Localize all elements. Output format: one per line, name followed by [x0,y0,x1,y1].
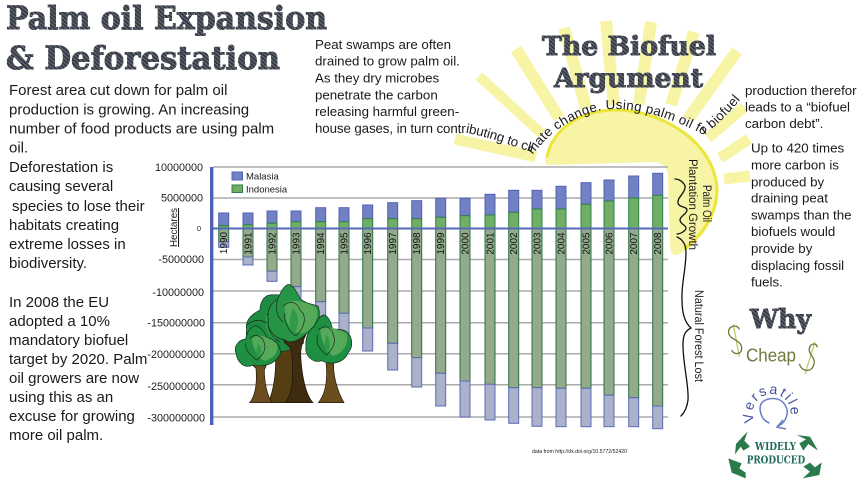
icon: dollar sign left [729,324,742,357]
icon: dollar sign right [799,342,817,374]
y-axis labels: 0 [197,224,201,233]
label: Widely Produced: WIDELY [754,439,797,453]
text block: 420 times more carbon: swamps than the [751,207,852,222]
heading: The Biofuel Argument [542,32,716,94]
year labels: 2002 [509,232,520,255]
brace: natural forest lost [677,237,691,416]
text block: biofuel carbon debt [745,83,857,131]
year labels: 2006 [604,232,616,255]
sun outline [547,110,717,249]
label: Cheap: Cheap [746,346,796,366]
bar 1993 [291,211,301,310]
heading: The Biofuel Argument: The Biofuel [542,32,716,62]
text block: EU biofuel target: adopted a 10% [9,313,110,330]
text block: 420 times more carbon: more carbon is [751,157,839,172]
legend [232,172,288,196]
y-axis labels [147,162,205,425]
text block: 420 times more carbon: biofuels would [751,224,835,239]
year labels: 1999 [436,232,447,255]
heading: Why: Why [749,305,812,335]
text block: forest area: oil. [9,140,28,156]
text block: EU biofuel target [9,294,147,444]
year labels [219,231,664,255]
bar 2000 [460,198,470,417]
tree: left [235,326,281,403]
text block: peat swamps: drained to grow palm oil. [315,54,460,69]
bar 1992 [267,211,277,281]
text block: peat swamps: penetrate the carbon [315,87,438,102]
legend: Malasia [246,172,279,182]
text block: 420 times more carbon: displacing fossil [751,258,844,273]
zero line [213,228,668,230]
bar 2004 [556,186,566,427]
y-axis labels: -200000000 [147,349,205,361]
year labels: 1990 [219,231,230,254]
text block: biofuel carbon debt: carbon debt”. [745,116,823,131]
text block: EU biofuel target: target by 2020. Palm [9,351,147,368]
y-axis labels: 10000000 [155,162,203,174]
text block: EU biofuel target: mandatory biofuel [9,332,128,349]
text block: EU biofuel target: oil growers are now [9,370,139,387]
text block: biofuel carbon debt: leads to a “biofuel [745,100,850,115]
y-axis labels: -5000000 [158,254,204,266]
text block: deforestation: causing several [9,178,113,195]
tree: center [268,284,319,403]
bar 2006 [604,180,614,427]
y-axis labels: -250000000 [147,381,205,393]
bar 1991 [243,213,253,265]
bar 1998 [412,201,422,387]
bar 2001 [485,194,495,420]
text block: 420 times more carbon: Up to 420 times [751,141,844,156]
y-axis labels: 5000000 [161,193,203,205]
bar 1997 [388,203,398,370]
y-axis labels: -10000000 [152,287,204,299]
y-axis labels: -300000000 [147,413,205,425]
bar 2007 [629,176,639,427]
label: Plantation Growth: Plantation Growth [686,159,698,250]
text block: 420 times more carbon: draining peat [751,191,828,206]
text block: deforestation: extreme losses in [9,236,126,253]
year labels: 1991 [244,232,254,255]
text block: forest area [9,82,274,156]
year labels: 1993 [292,232,302,255]
year labels: 2008 [653,232,664,255]
bars [219,173,663,429]
text block: EU biofuel target: In 2008 the EU [9,294,109,311]
year labels: 1997 [388,232,399,255]
year labels: 1992 [268,232,278,255]
y-axis labels: -150000000 [147,318,205,330]
bar 1996 [363,205,373,351]
text block: deforestation: Deforestation is [9,159,113,176]
text block: deforestation: biodiversity. [9,255,87,272]
data source: data from http://dx.doi.org/10.5772/52420 [532,449,627,455]
label: Widely Produced [747,439,805,466]
text block: deforestation: habitats creating [9,217,119,234]
text block: 420 times more carbon: provide by [751,241,813,256]
text block: 420 times more carbon: produced by [751,174,825,190]
label: Versatile on circular path: Versatile [742,386,798,424]
bar 1990 [219,213,229,247]
year labels: 2000 [460,232,472,255]
sun body [545,110,717,255]
curved text around the sun: house gases, in turn contributing to climate change. Using palm oil for biofuel [316,94,740,154]
text block: forest area: Forest area cut down for palm oil [9,82,227,99]
bar 2003 [532,190,542,426]
label: Widely Produced: PRODUCED [747,452,805,466]
bar 1994 [316,208,326,330]
title: Palm oil Expansion & Deforestation: & Deforestation [6,39,280,77]
icon: recycling arrows [728,432,822,478]
label: Natural Forest Lost: Natural Forest Lost [692,290,704,383]
title: Palm oil Expansion & Deforestation: Palm oil Expansion [6,0,327,37]
text block: peat swamps: Peat swamps are often [315,37,451,52]
heading: The Biofuel Argument: Argument [553,64,703,94]
year labels: 1996 [363,232,374,255]
legend: Indonesia [246,184,288,196]
text block: biofuel carbon debt: production therefor [745,83,857,98]
text block: EU biofuel target: more oil palm. [9,427,103,444]
text block: 420 times more carbon: fuels. [751,275,783,290]
year labels: 2001 [486,232,496,255]
illustration: group of trees [235,284,352,403]
year labels: 1998 [412,232,423,255]
year labels: 2003 [532,232,544,255]
title: Palm oil Expansion & Deforestation [6,0,327,77]
text block: peat swamps [315,37,460,119]
text block: deforestation [9,159,145,272]
sun illustration [455,21,750,255]
year labels: 2004 [556,232,568,255]
text block: peat swamps: releasing harmful green- [315,104,459,119]
text block: forest area: production is growing. An increasing [9,102,249,118]
text block: forest area: number of food products are using palm [9,120,274,138]
year labels: 1994 [316,232,327,255]
bar chart: palm oil growth and forest lost [147,162,668,429]
y axis [210,167,213,425]
year labels: 1995 [340,232,350,255]
text block: EU biofuel target: using this as an [9,389,113,406]
tree: right [306,315,352,403]
brace: palm oil plantation growth [675,179,687,234]
bar 1999 [436,198,446,406]
bar 1995 [339,208,349,333]
text block: 420 times more carbon [751,141,852,290]
text block: peat swamps: As they dry microbes [315,71,439,86]
sun rays [455,21,750,179]
text block: EU biofuel target: excuse for growing [9,408,135,425]
bar 2005 [581,183,591,427]
icon: circular arrow [760,398,787,429]
text block: deforestation: species to lose their [12,198,145,215]
year labels: 2007 [629,232,640,255]
y-axis title: Hectares [168,208,180,247]
label: Palm Oil: Palm Oil [700,185,712,222]
year labels: 2005 [582,232,592,255]
tree: back [246,295,305,403]
bar 2002 [509,190,519,423]
bar 2008 [653,173,663,429]
